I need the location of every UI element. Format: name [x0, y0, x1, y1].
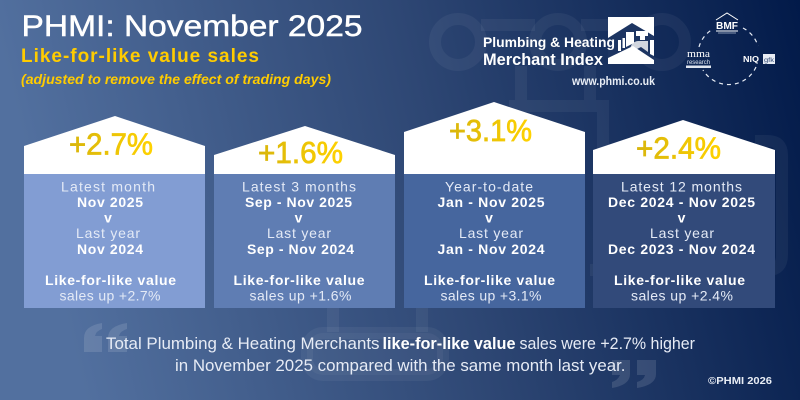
summary text: like-for-like value: [382, 335, 516, 353]
panel: latest 3 months: Like-for-like value: [234, 272, 365, 288]
panel: latest 3 months: Last year: [267, 225, 331, 241]
panel: latest 12 months: [593, 120, 775, 308]
panel: latest month: +2.7%: [69, 128, 153, 162]
logos: partner ring: BMF: [716, 21, 738, 32]
panel: year-to-date: v: [485, 210, 493, 226]
background pipe motif: [307, 19, 782, 375]
logos: partner ring: gfk: [764, 57, 775, 64]
panel: latest month: v: [104, 210, 112, 226]
logos: partner ring: research: [687, 60, 710, 66]
panel: year-to-date: Jan - Nov 2024: [438, 241, 545, 257]
panel: latest month: Latest month: [61, 178, 155, 194]
panel: year-to-date: Jan - Nov 2025: [438, 194, 545, 210]
panel: latest month: Last year: [76, 225, 140, 241]
panel: latest month: Like-for-like value: [45, 272, 176, 288]
panel: latest 12 months: sales up +2.4%: [631, 288, 733, 304]
panel: latest 3 months: [214, 126, 395, 308]
panel: latest 3 months: Sep - Nov 2025: [245, 194, 352, 210]
panel: latest 12 months: v: [678, 210, 686, 226]
title: PHMI: November 2025: [22, 10, 362, 43]
panel: year-to-date: sales up +3.1%: [440, 288, 542, 304]
panel: year-to-date: [404, 102, 585, 308]
summary text: in November 2025 compared with the same month last year.: [175, 357, 626, 375]
panel: latest month: Nov 2025: [77, 194, 143, 210]
panel: latest 12 months: Dec 2024 - Nov 2025: [608, 194, 755, 210]
summary text: [106, 335, 695, 375]
panel: latest 12 months: Last year: [650, 225, 714, 241]
panel: year-to-date: Last year: [459, 225, 523, 241]
panel: latest 3 months: v: [295, 210, 303, 226]
panel: year-to-date: Year-to-date: [445, 178, 533, 194]
panel: latest 3 months: sales up +1.6%: [250, 288, 352, 304]
logo: Plumbing & Heating Merchant Index: [483, 17, 656, 88]
logos: partner ring: NIQ: [743, 55, 759, 64]
logos: partner ring: [686, 13, 775, 85]
panel: latest 12 months: Like-for-like value: [614, 272, 745, 288]
panel: latest 3 months: Latest 3 months: [242, 178, 356, 194]
panel: year-to-date: Like-for-like value: [424, 272, 555, 288]
panel: latest 12 months: Latest 12 months: [621, 178, 742, 194]
panel: latest 3 months: Sep - Nov 2024: [247, 241, 354, 257]
panel: latest month: [24, 116, 205, 308]
logos: partner ring: mma: [687, 48, 710, 60]
logo: Plumbing & Heating Merchant Index: Plumbing & Heating: [483, 34, 615, 50]
subtitle: Like-for-like value sales: [21, 46, 259, 67]
panel: latest 3 months: +1.6%: [258, 136, 343, 170]
summary text: Total Plumbing & Heating Merchants: [106, 335, 379, 353]
panel: latest month: Nov 2024: [77, 241, 143, 257]
panel: year-to-date: +3.1%: [449, 114, 532, 148]
icon: opening quote mark: [84, 323, 127, 352]
summary text: sales were +2.7% higher: [520, 335, 695, 353]
panel: latest 12 months: Dec 2023 - Nov 2024: [608, 241, 755, 257]
logo: Plumbing & Heating Merchant Index: www.phmi.co.uk: [571, 76, 656, 88]
note: (adjusted to remove the effect of trading days): [21, 72, 332, 87]
copyright: ©PHMI 2026: [708, 375, 772, 387]
panel: latest 12 months: +2.4%: [636, 132, 721, 166]
icon: closing quote mark: [612, 360, 656, 388]
logo: Plumbing & Heating Merchant Index: Merchant Index: [483, 51, 604, 69]
panel: latest month: sales up +2.7%: [60, 288, 160, 304]
